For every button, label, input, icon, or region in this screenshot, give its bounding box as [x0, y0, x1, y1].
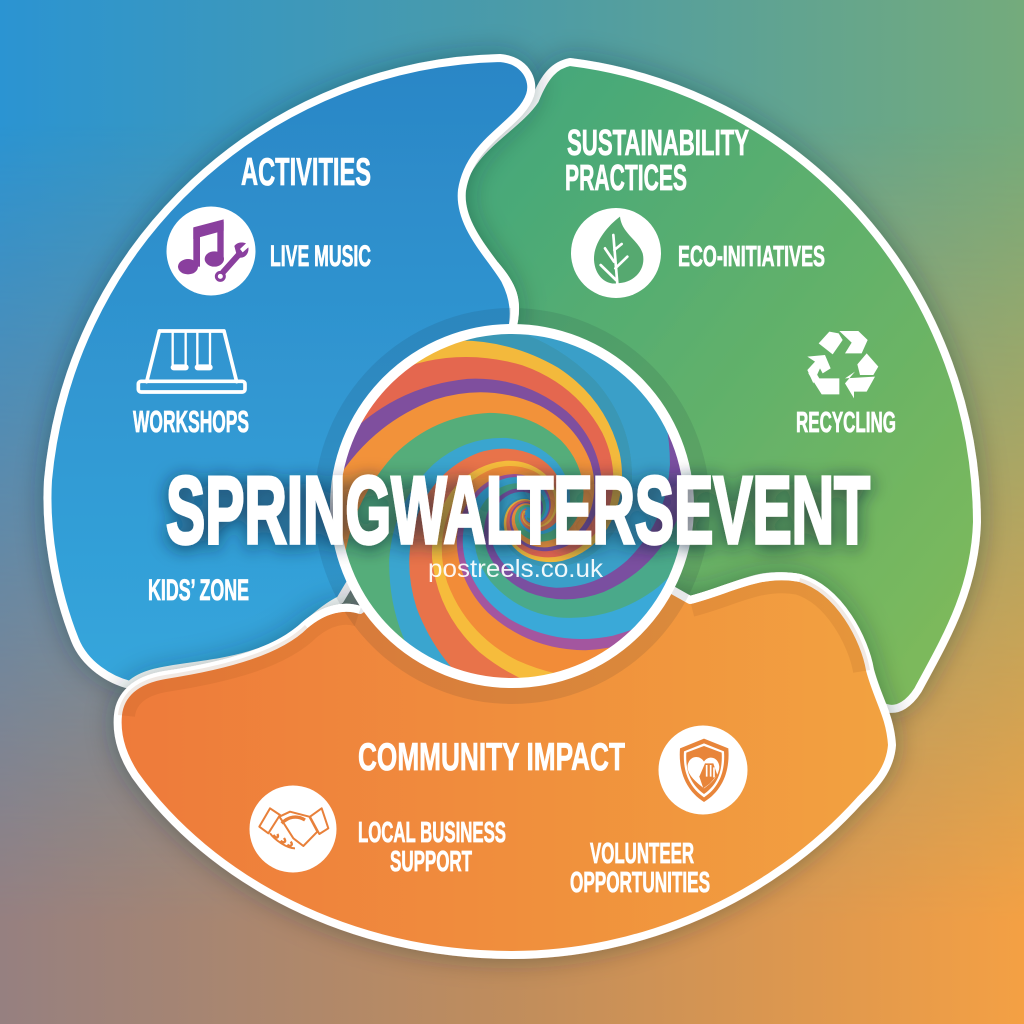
- panel: sustainability practices: [460, 62, 977, 709]
- label: live music: LIVE MUSIC: [270, 240, 371, 273]
- centre swirl: [330, 324, 694, 688]
- icon: swing set: [138, 331, 245, 392]
- panel: activities: [47, 58, 531, 685]
- icon: leaf: [571, 208, 661, 298]
- label: volunteer opportunities: [570, 838, 710, 899]
- label: recycling: RECYCLING: [796, 407, 896, 439]
- heading: sustainability practices: SUSTAINABILITY: [567, 122, 749, 163]
- label: local business support: [358, 817, 506, 878]
- orange inner edge shade: [118, 576, 870, 715]
- panel edges near centre: [305, 265, 800, 625]
- icon: music and wrench: [166, 206, 256, 296]
- icon: handshake: [250, 786, 336, 872]
- heading: activities: ACTIVITIES: [241, 151, 371, 194]
- panel: community impact: [118, 500, 892, 955]
- label: volunteer opportunities: OPPORTUNITIES: [570, 867, 710, 899]
- label: local business support: SUPPORT: [390, 846, 472, 878]
- heading: community impact: COMMUNITY IMPACT: [358, 736, 625, 779]
- icon: recycling: [807, 331, 878, 398]
- label: eco-initiatives: ECO-INITIATIVES: [678, 241, 825, 273]
- website: postreels.co.uk: [428, 555, 604, 583]
- label: kids zone: KIDS’ ZONE: [148, 574, 249, 607]
- label: volunteer opportunities: VOLUNTEER: [590, 838, 694, 870]
- label: workshops: WORKSHOPS: [133, 404, 249, 439]
- label: local business support: LOCAL BUSINESS: [358, 817, 506, 849]
- icon: shield with heart: [658, 726, 748, 814]
- heading: sustainability practices: PRACTICES: [565, 157, 687, 198]
- central halo: [314, 308, 710, 704]
- heading: sustainability practices: [565, 122, 749, 198]
